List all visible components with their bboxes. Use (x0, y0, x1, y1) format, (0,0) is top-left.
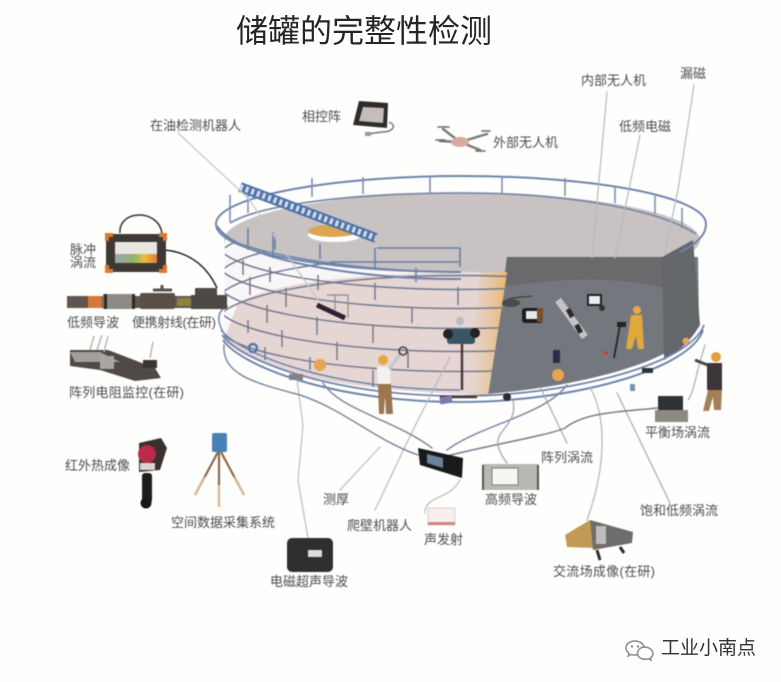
diagram: tank inspection illustration (64, 66, 723, 588)
label: phased array: 相控阵 (302, 109, 341, 124)
label: acoustic emission: 声发射 (424, 532, 463, 547)
label: portable radiography: 便携射线(在研) (132, 315, 216, 330)
worker on the right (695, 352, 722, 411)
device: acoustic emission (428, 508, 455, 525)
label: internal drone: 内部无人机 (581, 73, 646, 88)
small tablet (588, 295, 605, 311)
device: crawler robot recorder (418, 448, 463, 478)
device: pulsed eddy current (105, 215, 217, 288)
handheld meter (553, 350, 560, 363)
roof manway (308, 225, 362, 242)
watermark: 工业小南点 (661, 638, 756, 659)
ladder crawler (558, 300, 585, 337)
inspection bar on wall (317, 295, 348, 318)
crawler robot on stand (440, 317, 480, 401)
label: magnetic flux leakage: 漏磁 (680, 66, 706, 81)
device: AC field imaging (565, 520, 633, 560)
device: balanced field eddy current (655, 396, 688, 422)
label: low frequency guided wave: 低频导波 (67, 315, 119, 330)
label: infrared thermography: 红外热成像 (65, 458, 130, 473)
worker in yellow suit (604, 306, 644, 358)
label: array resistance monitoring: 阵列电阻监控(在研) (69, 385, 184, 400)
label: saturated low frequency eddy current: 饱和低频涡流 (640, 503, 718, 518)
worker on the left (377, 347, 407, 414)
device: external drone (436, 127, 490, 151)
device: phased array (353, 101, 393, 136)
device: array resistance monitoring (70, 335, 161, 381)
device: high frequency guided wave (482, 464, 539, 490)
guard rails (216, 176, 706, 402)
tank wall (224, 238, 508, 396)
device: EMAT guided wave (287, 538, 333, 572)
label: AC field imaging: 交流场成像(在研) (553, 564, 655, 579)
device: spatial data tripod (195, 433, 244, 507)
label: crawler robot: 爬壁机器人 (347, 518, 412, 533)
icon: chat bubbles (625, 640, 654, 662)
tank (216, 176, 706, 402)
roof crane truss (240, 187, 376, 238)
label: thickness measurement: 测厚 (323, 492, 349, 507)
device: pipe with low frequency guided wave and portable radiography (67, 285, 227, 309)
floating roof (224, 193, 700, 287)
label: balanced field eddy current: 平衡场涡流 (645, 425, 710, 440)
watermark (625, 638, 756, 662)
labels (65, 66, 718, 589)
scanner (522, 308, 543, 323)
label: in-oil robot: 在油检测机器人 (150, 118, 241, 133)
sensors (249, 338, 690, 401)
crawler with cable (502, 296, 532, 307)
label: external drone: 外部无人机 (493, 135, 558, 150)
label: high frequency guided wave: 高频导波 (485, 492, 537, 507)
label: array eddy current: 阵列涡流 (541, 450, 593, 465)
label: pulsed eddy current: 涡流 (70, 255, 96, 270)
cutaway interior (488, 240, 700, 394)
interior equipment (249, 295, 690, 414)
label: pulsed eddy current: 脉冲 (70, 242, 96, 257)
label: spatial data acquisition: 空间数据采集系统 (171, 515, 275, 530)
label: EMAT guided wave: 电磁超声导波 (270, 574, 348, 589)
device: infrared thermal camera (138, 438, 167, 508)
leader lines and cables (178, 85, 705, 538)
label: low frequency EM: 低频电磁 (619, 119, 671, 134)
title: 储罐的完整性检测 (236, 13, 492, 49)
